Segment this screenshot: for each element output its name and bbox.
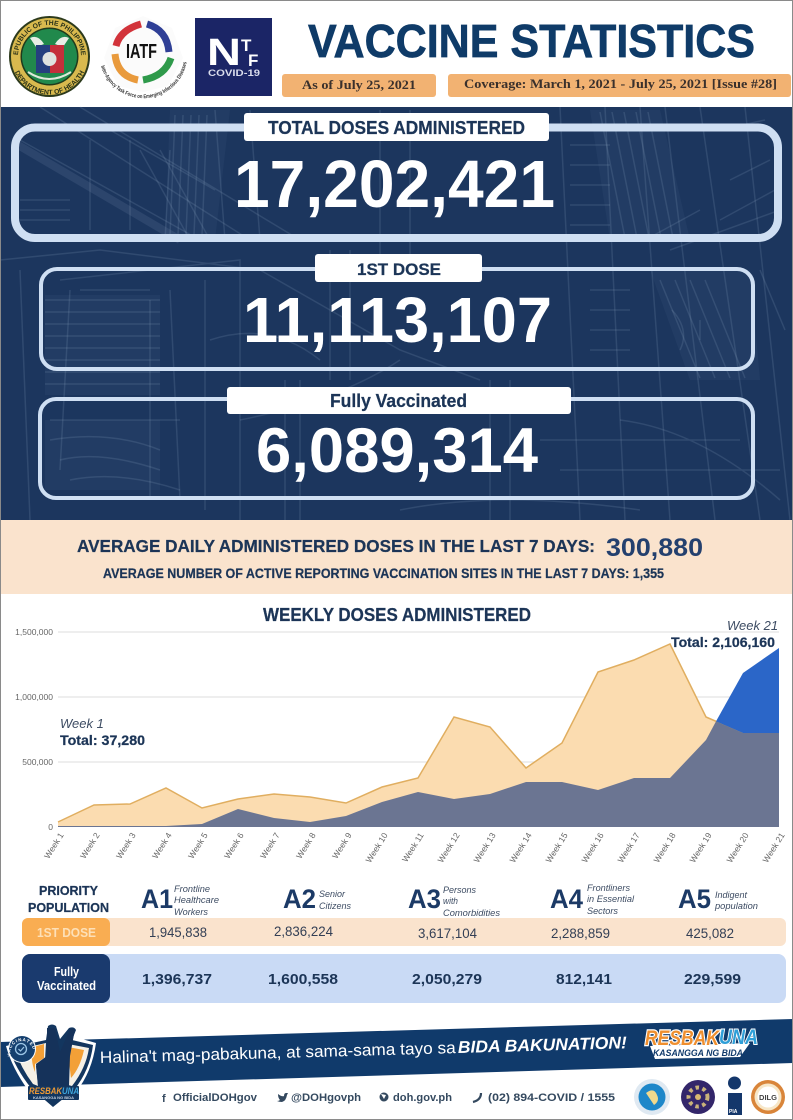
column A4: A4	[550, 884, 583, 914]
column A5: population	[714, 901, 758, 912]
icon: Resbakuna shield: RESBAK	[29, 1086, 63, 1096]
fully vaccinated number: 6,089,314	[256, 416, 538, 486]
column A1: Frontline	[174, 884, 210, 895]
column A1: Healthcare	[174, 895, 219, 906]
y axis labels: 500,000	[22, 757, 53, 767]
contact: facebook: f	[162, 1093, 166, 1105]
column A2: Citizens	[319, 901, 351, 912]
x axis labels: Week 7	[258, 831, 282, 860]
banner slogan emphasis: BIDA BAKUNATION!	[458, 1033, 627, 1057]
average daily doses number: 300,880	[606, 534, 703, 562]
total doses number: 17,202,421	[234, 147, 555, 222]
callout: week 21: Week 21	[727, 618, 778, 633]
first dose number: 11,113,107	[243, 284, 552, 356]
column A1: Workers	[174, 907, 208, 918]
row: fully vaccinated: 1,600,558	[268, 971, 338, 988]
row: fully vaccinated: Fully	[54, 965, 79, 979]
x axis labels: Week 5	[186, 831, 210, 860]
column A4: Frontliners	[587, 883, 630, 894]
x axis labels: Week 18	[652, 831, 678, 864]
callout: week 1: Total: 37,280	[60, 733, 145, 748]
row: fully vaccinated: Vaccinated	[37, 979, 96, 993]
y axis labels	[15, 627, 53, 832]
total doses box	[15, 113, 778, 238]
row: first dose: 1,945,838	[149, 925, 207, 940]
callout: week 1	[60, 716, 145, 748]
logo: PIA: PIA	[729, 1109, 738, 1115]
column A3	[408, 884, 500, 919]
logo: Department of Health seal	[9, 16, 90, 97]
column A2: Senior	[319, 889, 346, 900]
logo: DILG	[751, 1080, 785, 1114]
date pill	[282, 74, 436, 97]
x axis labels: Week 21	[761, 831, 787, 864]
contact: twitter: @DOHgovph	[291, 1092, 361, 1104]
coverage pill: Coverage: March 1, 2021 - July 25, 2021 [Issue #28]	[464, 76, 777, 91]
priority population heading: POPULATION	[28, 900, 109, 915]
panel: weekly doses chart	[15, 605, 787, 864]
x axis labels: Week 17	[616, 831, 642, 864]
y axis labels: 1,500,000	[15, 627, 53, 637]
priority population heading	[28, 883, 109, 915]
column A3: Comorbidities	[443, 908, 500, 919]
logo: PIA	[728, 1076, 742, 1115]
y axis labels: 1,000,000	[15, 692, 53, 702]
header	[9, 15, 791, 98]
logo: DILG: DILG	[759, 1093, 777, 1102]
x axis labels: Week 12	[436, 831, 462, 864]
x axis labels	[42, 831, 787, 864]
callout: week 21	[671, 618, 778, 650]
column A4: Sectors	[587, 906, 618, 917]
logo: NTF COVID-19: N	[207, 32, 241, 74]
logo: Resbakuna: KASANGGA NG BIDA	[653, 1048, 743, 1058]
row: fully vaccinated: 2,050,279	[412, 971, 482, 988]
first dose label	[315, 254, 482, 282]
x axis labels: Week 14	[508, 831, 534, 864]
contact: phone: (02) 894-COVID / 1555	[488, 1092, 615, 1104]
column A2	[283, 884, 351, 914]
contact: facebook: OfficialDOHgov	[173, 1092, 258, 1104]
column A1: A1	[141, 884, 173, 914]
logo: Resbakuna	[645, 1026, 758, 1059]
x axis labels: Week 6	[222, 831, 246, 860]
chart title: WEEKLY DOSES ADMINISTERED	[263, 605, 531, 625]
column A5: A5	[678, 884, 711, 914]
logo: IATF: Inter-Agency Task Force on Emerging Infectious Diseases	[101, 62, 186, 98]
panel: priority population table	[22, 883, 786, 1003]
row: fully vaccinated: 1,396,737	[142, 971, 212, 988]
callout: week 21: Total: 2,106,160	[671, 635, 775, 650]
x axis labels: Week 16	[580, 831, 606, 864]
reporting sites text: AVERAGE NUMBER OF ACTIVE REPORTING VACCINATION SITES IN THE LAST 7 DAYS: 1,355	[103, 566, 664, 581]
row: first dose: 1ST DOSE	[37, 925, 96, 940]
callout: week 1: Week 1	[60, 716, 104, 731]
column A5	[678, 884, 758, 914]
column A1	[141, 884, 219, 918]
x axis labels: Week 3	[114, 831, 138, 860]
row: fully vaccinated: 812,141	[556, 971, 612, 988]
first dose box	[41, 254, 753, 369]
total doses label: TOTAL DOSES ADMINISTERED	[268, 118, 525, 138]
banner	[0, 1019, 793, 1087]
fully vaccinated box	[40, 387, 753, 498]
row: fully vaccinated: 229,599	[684, 971, 741, 988]
logo: NTF COVID-19: T	[241, 36, 252, 55]
x axis labels: Week 11	[400, 831, 426, 864]
logo: Resbakuna: UNA	[719, 1026, 758, 1049]
column A3: Persons	[443, 885, 476, 896]
panel: dose totals	[0, 107, 793, 520]
column A2: A2	[283, 884, 316, 914]
logo: agency seal purple	[681, 1080, 715, 1114]
row: first dose: 2,836,224	[274, 924, 333, 939]
logo: Department of Health seal: DEPARTMENT OF HEALTH	[15, 70, 84, 94]
row: first dose	[22, 918, 786, 946]
row: first dose: 425,082	[686, 926, 734, 941]
area: fully vaccinated	[58, 648, 779, 827]
x axis labels: Week 13	[472, 831, 498, 864]
date pill: As of July 25, 2021	[302, 77, 416, 92]
logo: Resbakuna: RESBAK	[645, 1027, 721, 1050]
title: VACCINE STATISTICS	[308, 15, 755, 67]
fully vaccinated label	[227, 387, 571, 414]
x axis labels: Week 1	[42, 831, 66, 860]
x axis labels: Week 19	[688, 831, 714, 864]
logo: IATF	[101, 20, 186, 98]
column A3: with	[443, 896, 458, 907]
x axis labels: Week 15	[544, 831, 570, 864]
logo: IATF: IATF	[126, 41, 157, 63]
y axis labels: 0	[48, 822, 53, 832]
column A3: A3	[408, 884, 441, 914]
column A4	[550, 883, 635, 917]
x axis labels: Week 4	[150, 831, 174, 860]
x axis labels: Week 10	[364, 831, 390, 864]
contact: website: doh.gov.ph	[393, 1092, 452, 1104]
banner slogan: Halina't mag-pabakuna, at sama-sama tayo sa	[100, 1039, 457, 1067]
area: first dose	[58, 644, 779, 827]
row: fully vaccinated	[22, 954, 786, 1003]
x axis labels: Week 20	[725, 831, 751, 864]
icon: Resbakuna shield: UNA	[62, 1086, 79, 1096]
logo: NTF COVID-19	[195, 18, 272, 96]
priority population heading: PRIORITY	[39, 883, 98, 898]
icon: Resbakuna shield: KASANGGA NG BIDA	[33, 1095, 74, 1100]
first dose label: 1ST DOSE	[357, 260, 441, 279]
coverage pill	[448, 74, 791, 97]
panel: seven-day averages	[0, 520, 793, 594]
logo: agency seal blue	[634, 1079, 670, 1115]
badge: vaccinated: VACCINATED	[7, 1038, 35, 1057]
x axis labels: Week 8	[294, 831, 318, 860]
column A4: in Essential	[587, 894, 635, 905]
logo: NTF COVID-19: COVID-19	[208, 68, 260, 78]
logo: NTF COVID-19: F	[248, 51, 258, 70]
column A5: Indigent	[715, 890, 747, 901]
total doses label	[244, 113, 549, 141]
fully vaccinated label: Fully Vaccinated	[330, 391, 467, 411]
average daily doses text: AVERAGE DAILY ADMINISTERED DOSES IN THE LAST 7 DAYS:	[77, 536, 595, 556]
x axis labels: Week 2	[78, 831, 102, 860]
icon: Resbakuna shield	[6, 1024, 96, 1107]
x axis labels: Week 9	[330, 831, 354, 860]
row: first dose: 2,288,859	[551, 926, 610, 941]
row: first dose: 3,617,104	[418, 926, 477, 941]
footer contacts	[162, 1092, 615, 1105]
